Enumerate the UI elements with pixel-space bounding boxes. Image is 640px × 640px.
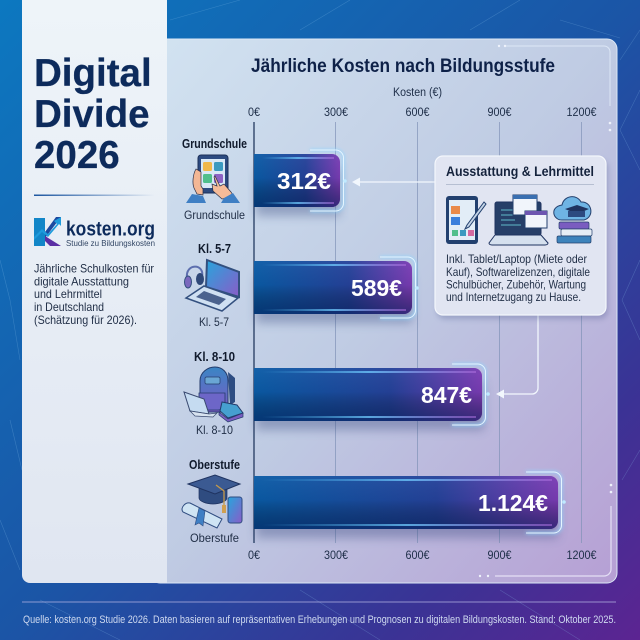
bar: Kl. 8-10 847€: 847€ [421, 382, 472, 408]
panel: chart background [150, 39, 617, 583]
arrow: callout to 312€ bar [352, 178, 435, 186]
row label: Kl. 5-7 [198, 242, 231, 329]
icon: kosten.org logo [34, 217, 61, 246]
axis top: 1200€ [566, 107, 597, 119]
row label: Oberstufe [189, 458, 240, 545]
axis title: Kosten (€) [393, 87, 442, 99]
axis bottom: 900€ [488, 550, 512, 562]
callout text: und Internetzugang zu Hause. [446, 290, 581, 304]
icon: tablet and hands [186, 155, 240, 203]
bar: Kl. 5-7 589€ [254, 257, 419, 323]
bar: Grundschule 312€: 312€ [277, 168, 331, 194]
description: und Lehrmittel [34, 287, 102, 301]
row label: Grundschule [182, 137, 247, 222]
bar: Oberstufe 1.124€ [254, 472, 566, 538]
axis bottom: 300€ [324, 550, 349, 562]
callout text [446, 252, 590, 304]
axis bottom: 600€ [406, 550, 430, 562]
arrow: callout to 847€ bar [496, 315, 538, 398]
description: digitale Ausstattung [34, 274, 129, 288]
axis bottom [248, 550, 597, 562]
grid [336, 122, 582, 543]
callout text: Inkl. Tablet/Laptop (Miete oder [446, 252, 587, 266]
row label: Oberstufe: Oberstufe [189, 458, 240, 472]
callout text: Kauf), Softwarelizenzen, digitale [446, 265, 590, 279]
callout text: Schulbücher, Zubehör, Wartung [446, 278, 586, 292]
icon: laptop with code windows [489, 195, 548, 245]
row label: Kl. 8-10: Kl. 8-10 [194, 350, 235, 364]
icon: laptop and headphones [184, 260, 239, 311]
bar: Kl. 8-10 847€ [254, 364, 490, 430]
panel: sidebar [22, 0, 167, 583]
row label: Kl. 5-7: Kl. 5-7 [198, 242, 231, 256]
row label: Grundschule: Grundschule [182, 137, 247, 151]
row label: Grundschule: Grundschule [184, 208, 245, 222]
description: (Schätzung für 2026). [34, 313, 137, 327]
axis top: 0€ [248, 107, 261, 119]
axis top: 900€ [488, 107, 512, 119]
axis top: 300€ [324, 107, 349, 119]
title: Divide [34, 93, 150, 136]
title: Digital [34, 52, 152, 95]
row label: Oberstufe: Oberstufe [190, 531, 239, 545]
row label: Kl. 8-10: Kl. 8-10 [196, 423, 233, 437]
bar: Oberstufe 1.124€: 1.124€ [478, 490, 548, 516]
title: 2026 [34, 134, 120, 177]
chart title: Jährliche Kosten nach Bildungsstufe [251, 56, 555, 77]
callout heading: Ausstattung & Lehrmittel [446, 163, 594, 179]
description [34, 262, 154, 327]
row label: Kl. 8-10 [194, 350, 235, 437]
icon: tablet and pen [446, 196, 486, 244]
logo text [66, 218, 155, 248]
bar: Kl. 5-7 589€: 589€ [351, 275, 402, 301]
description: in Deutschland [34, 300, 104, 314]
axis top: 600€ [406, 107, 430, 119]
axis line [253, 122, 255, 543]
footer rule [22, 601, 616, 603]
logo text: kosten.org [66, 218, 155, 240]
axis top [248, 107, 597, 119]
bar: Grundschule 312€ [254, 150, 347, 216]
row label: Kl. 5-7: Kl. 5-7 [199, 315, 229, 329]
axis bottom: 1200€ [566, 550, 597, 562]
axis bottom: 0€ [248, 550, 261, 562]
callout: Ausstattung & Lehrmittel [435, 156, 608, 319]
icon: graduation cap, diploma, phone [182, 475, 242, 528]
icon: backpack, laptop, books [184, 367, 243, 422]
logo text: Studie zu Bildungskosten [66, 238, 155, 248]
description: Jährliche Schulkosten für [34, 262, 154, 276]
icon: cloud, cap, books [554, 197, 592, 243]
